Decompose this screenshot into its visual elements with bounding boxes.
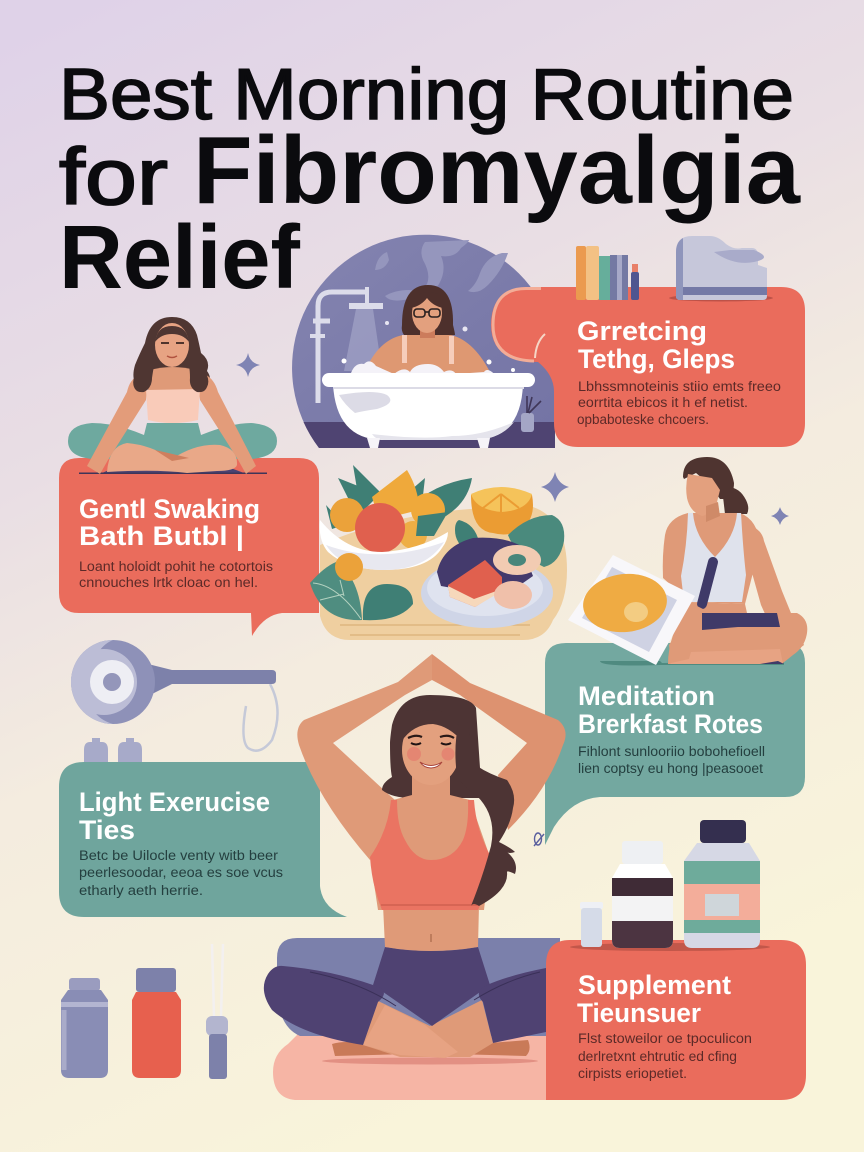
dropper (206, 944, 228, 1079)
illustration: massage device (71, 640, 278, 762)
heading: Meditation (578, 681, 715, 711)
dark bottle (612, 841, 673, 948)
panel: left teal card (59, 762, 347, 917)
feet (332, 1040, 530, 1056)
long hair right (455, 722, 516, 906)
heading: Supplement (578, 970, 731, 1000)
heading (79, 787, 270, 845)
body text (79, 559, 273, 590)
body text: eorrtita ebicos it h ef netist. (578, 395, 748, 410)
title (59, 55, 801, 308)
ponytail (722, 487, 748, 514)
shins (107, 443, 237, 473)
panel: bottom coral card (546, 940, 806, 1100)
legs (668, 602, 807, 664)
dark handle (702, 562, 713, 604)
bathtub (322, 321, 535, 448)
illustration: bottles on coral card (580, 820, 760, 948)
icon: small pin (534, 833, 544, 846)
midriff (383, 905, 479, 951)
body text (79, 848, 283, 898)
body text (578, 1031, 752, 1081)
forearm (669, 605, 703, 663)
heading: Grretcing (577, 316, 707, 346)
heading: Tieunsuer (577, 998, 701, 1028)
right arm (432, 654, 566, 830)
icon: sparkle (771, 507, 789, 525)
bowl with fruit (320, 465, 472, 570)
body text: Fihlont sunlooriio bobohefioell (578, 744, 765, 759)
red bottle (132, 968, 181, 1078)
peach mat (273, 1032, 560, 1100)
hair locks (133, 345, 208, 392)
cup (580, 902, 603, 947)
teal trousers (68, 423, 277, 459)
big bottle (684, 820, 760, 948)
illustration: woman in bath (292, 235, 558, 448)
body text: etharly aeth herrie. (79, 883, 203, 898)
right thigh (479, 968, 546, 1043)
face (402, 715, 460, 785)
hair and face (683, 457, 734, 499)
body text: Lbhssmnoteinis stiio emts freeo (578, 379, 781, 394)
torso (148, 367, 198, 392)
side leaves (455, 515, 564, 567)
title: Best Morning Routine (59, 55, 794, 135)
body text (577, 379, 781, 427)
illustration: main woman (264, 654, 566, 1100)
chest and neck (370, 775, 490, 910)
body text: peerlesoodar, eeoa es soe vcus (79, 865, 283, 880)
tablet (568, 555, 695, 665)
heading: Brerkfast Rotes (578, 709, 763, 739)
heading: Tethg, Gleps (578, 344, 735, 374)
bottom leaves (310, 553, 413, 620)
body text: opbaboteske chcoers. (577, 412, 709, 427)
torso (663, 513, 760, 604)
title: Fibromyalgia (193, 117, 801, 224)
body text: Betc be Uilocle venty witb beer (79, 848, 279, 863)
shadow (600, 661, 784, 666)
shorts (373, 947, 490, 1026)
title: for (59, 132, 168, 221)
body text (578, 744, 765, 776)
illustration: food board (310, 465, 567, 640)
sports top (370, 800, 491, 910)
pillow device (669, 236, 773, 302)
panel: left coral card (59, 458, 319, 636)
shower (310, 287, 383, 403)
shins (363, 1000, 493, 1057)
left arm (297, 654, 432, 860)
illustration: bottles bottom left (61, 944, 228, 1079)
floor shadow (102, 467, 244, 473)
heading (577, 970, 731, 1028)
body text: Loant holoidt pohit he cotortois (79, 559, 273, 574)
illustration: seated woman with tablet (568, 457, 807, 666)
body text: cnnouches lrtk cloac on hel. (79, 575, 258, 590)
panel: top right coral card (491, 236, 805, 447)
heading: Gentl Swaking (79, 494, 260, 524)
body text: lien coptsy eu hong |peasooet (578, 761, 763, 776)
tank top (681, 513, 746, 602)
body text: cirpists eriopetiet. (578, 1066, 687, 1081)
body text: Flst stoweilor oe tpoculicon (578, 1031, 752, 1046)
icon: sparkle (236, 353, 260, 377)
illustration: meditating woman left (68, 317, 277, 474)
panel: right teal card (545, 643, 805, 845)
left thigh (264, 966, 384, 1045)
body text: derlretxnt ehtrutic ed cfing (578, 1049, 737, 1064)
heading: Ties (79, 815, 135, 845)
icon: sparkle (541, 472, 569, 502)
orange slice (471, 487, 533, 534)
small caps (84, 738, 142, 762)
heading: Light Exerucise (79, 787, 270, 817)
heading (79, 494, 260, 551)
plate with food (421, 538, 553, 628)
heading (577, 316, 735, 374)
arms (87, 374, 256, 474)
title: Relief (59, 208, 301, 308)
heading: Bath Butbl | (79, 521, 244, 551)
woman bathing (363, 285, 492, 376)
heading (578, 681, 763, 739)
lavender mat (277, 938, 560, 1036)
books (576, 246, 639, 300)
right arm (747, 525, 804, 651)
reed diffuser (521, 396, 541, 432)
hair back (382, 695, 482, 798)
hair (133, 317, 210, 391)
purple bottle (61, 978, 108, 1078)
